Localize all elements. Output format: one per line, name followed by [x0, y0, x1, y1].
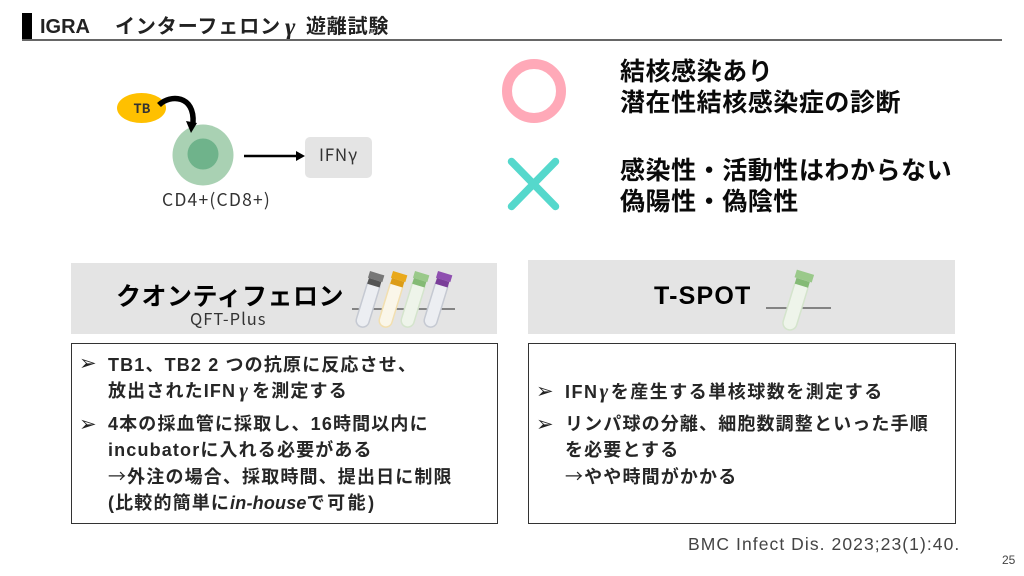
QFT point 2: 4本の採血管に採取し、16時間以内に — [108, 414, 429, 434]
QFT point 2: (比較的簡単にin-houseで可能) — [108, 493, 377, 513]
cell label: CD4+(CD8+) — [162, 187, 271, 212]
arrow to IFN — [244, 151, 305, 161]
icon: tube — [766, 270, 831, 331]
QFT heading: クオンティフェロン — [116, 283, 344, 311]
page number: 25 — [1002, 553, 1015, 567]
text: positive meaning: 結核感染あり — [620, 58, 773, 86]
T-SPOT point 2: →やや時間がかかる — [565, 463, 737, 489]
bullet 1: ➢ — [536, 379, 554, 403]
QFT subtitle: QFT-Plus — [190, 306, 266, 330]
title: γ — [285, 14, 295, 41]
T-SPOT point 2: を必要とする — [565, 440, 679, 460]
QFT point 1: TB1、TB2 2 つの抗原に反応させ、 — [108, 355, 417, 375]
text: limits: 感染性・活動性はわからない — [620, 157, 952, 185]
T-SPOT point 2: リンパ球の分離、細胞数調整といった手順 — [565, 414, 929, 434]
bullet 2: ➢ — [536, 412, 554, 436]
icon: four blood tubes — [352, 271, 455, 328]
T-SPOT point 1: IFNγを産生する単核球数を測定する — [565, 379, 884, 403]
QFT point 1: 放出されたIFNγを測定する — [108, 378, 348, 402]
title marker — [22, 13, 32, 39]
TB antigen — [117, 93, 166, 123]
diagram: TB stimulates CD4 cell to release IFN-gamma — [117, 93, 372, 212]
panel: QFT details — [71, 343, 498, 524]
TB antigen: TB — [134, 98, 151, 117]
QFT point 2: →外注の場合、採取時間、提出日に制限 — [108, 463, 453, 489]
panel: T-SPOT header — [528, 260, 955, 334]
panel: QFT header — [71, 263, 497, 334]
bullet 2: ➢ — [79, 412, 97, 436]
citation: BMC Infect Dis. 2023;23(1):40. — [688, 534, 960, 554]
IFN gamma box — [305, 137, 372, 178]
QFT point 1 — [108, 355, 417, 402]
IFN gamma box: IFNγ — [319, 141, 358, 166]
icon: circle — [502, 59, 566, 123]
bullet 1: ➢ — [79, 351, 97, 375]
panel: T-SPOT details — [528, 343, 956, 524]
T-SPOT point 2 — [565, 414, 929, 489]
text: positive meaning: 潜在性結核感染症の診断 — [620, 89, 901, 117]
text: limits: 偽陽性・偽陰性 — [620, 188, 799, 216]
T-SPOT heading: T-SPOT — [654, 282, 751, 310]
title — [40, 14, 389, 41]
curved arrow — [159, 98, 197, 133]
QFT point 2: incubatorに入れる必要がある — [108, 440, 373, 460]
text: limits — [620, 157, 952, 216]
title: 遊離試験 — [306, 16, 389, 38]
title: IGRA — [40, 16, 90, 38]
text: positive meaning — [620, 58, 901, 117]
QFT point 2 — [108, 414, 453, 513]
title: インターフェロン — [115, 16, 281, 38]
CD4 cell — [172, 124, 234, 186]
icon: cross — [508, 158, 560, 210]
